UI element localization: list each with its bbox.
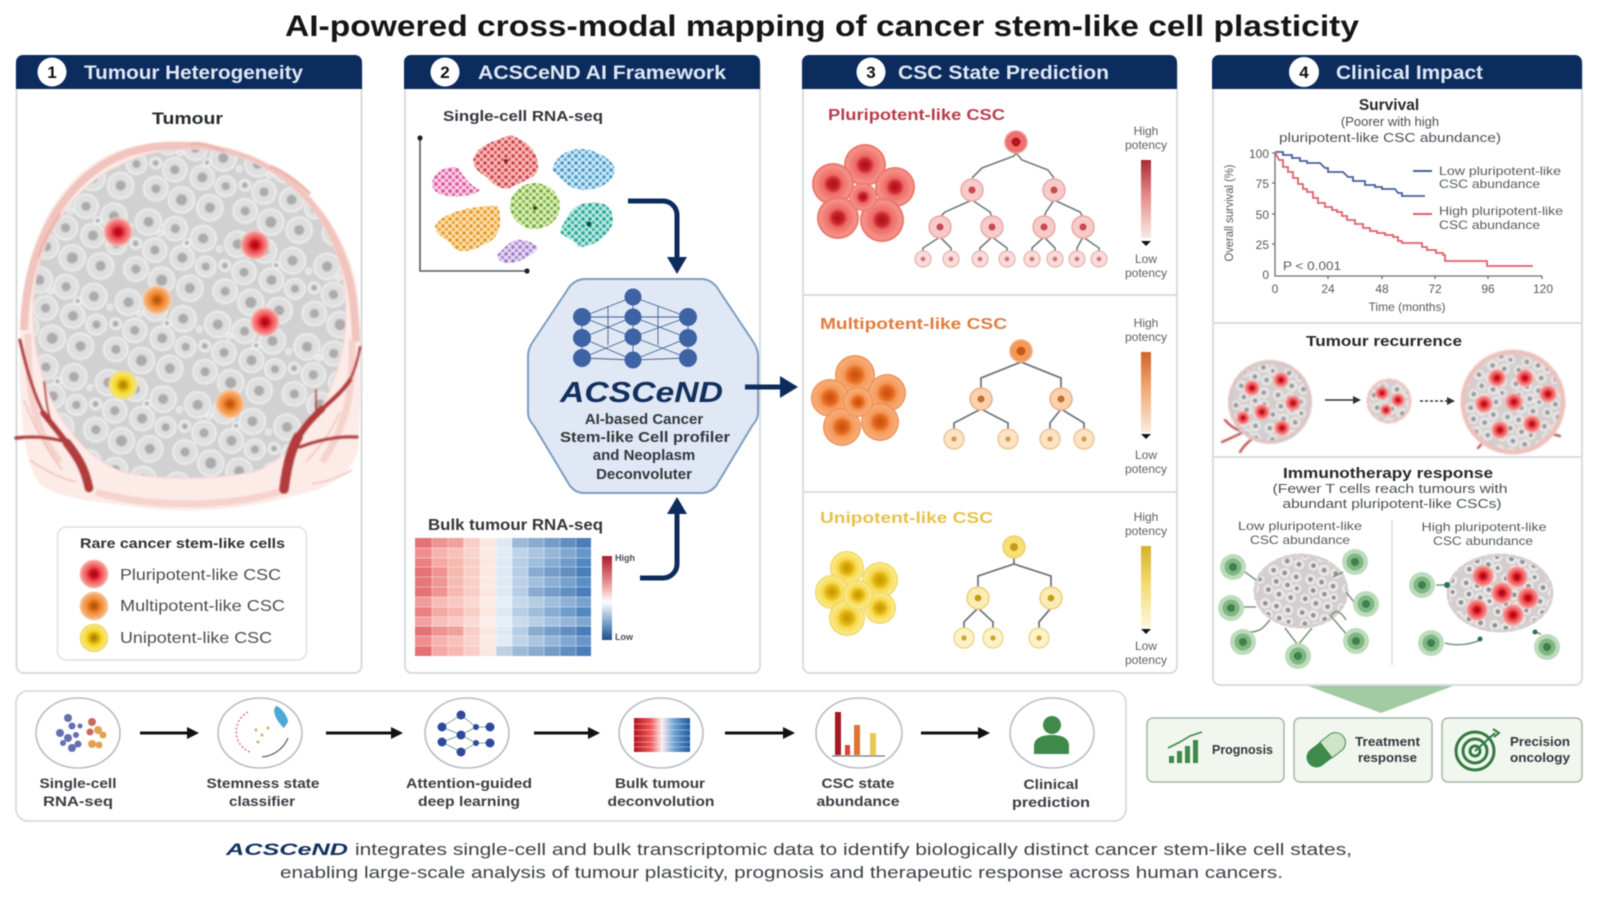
chart: Kaplan-Meier survival curves: Low pluripotent-like — [1439, 164, 1561, 178]
step: bulk tumour deconvolution — [608, 698, 714, 809]
card: precision oncology: Precision — [1510, 735, 1570, 749]
section: unipotent-like CSC: Unipotent-like CSC — [820, 510, 994, 527]
card: treatment response — [1294, 718, 1432, 782]
legend: rare cancer stem-like cells: Pluripotent-like CSC — [120, 567, 281, 584]
panel: clinical impact — [1212, 55, 1582, 685]
card: prognosis — [1147, 718, 1284, 782]
footer summary: ACSCeND — [225, 840, 348, 859]
chart: Kaplan-Meier survival curves: 24 — [1321, 282, 1335, 296]
potency scale: multipotent: Low — [1135, 448, 1157, 462]
heading: survival — [1279, 97, 1501, 145]
panel: ACSCeND AI framework — [404, 55, 798, 673]
panel: tumour heterogeneity — [16, 55, 362, 673]
icon: rising bars — [1168, 732, 1202, 763]
label: bulk tumour RNA-seq: Bulk tumour RNA-seq — [428, 517, 603, 534]
green funnel arrow — [1308, 686, 1453, 713]
icon: neural network — [573, 288, 697, 368]
model description: AI-based Cancer — [585, 411, 703, 428]
heading: immunotherapy response — [1272, 466, 1508, 511]
icon: target — [1456, 729, 1499, 770]
section: multipotent-like CSC: Multipotent-like CSC — [820, 316, 1008, 333]
potency scale: unipotent: Low — [1135, 639, 1157, 653]
arrow — [725, 727, 795, 739]
chart: Kaplan-Meier survival curves: Overall survival (%) — [1224, 164, 1236, 262]
panel header 1: 1 — [47, 63, 57, 82]
heading: immunotherapy response: Immunotherapy response — [1283, 466, 1493, 482]
chart: Kaplan-Meier survival curves — [1224, 147, 1563, 314]
arrow — [140, 727, 199, 739]
model description — [560, 411, 730, 483]
footer summary — [225, 840, 1352, 882]
chart: Kaplan-Meier survival curves: CSC abundance — [1439, 177, 1540, 191]
arrow: model to prediction — [745, 376, 798, 398]
model description: and Neoplasm — [593, 447, 695, 464]
step: attention-guided deep learning — [406, 698, 532, 809]
potency scale: unipotent — [1125, 510, 1167, 667]
step: single-cell RNA-seq — [36, 698, 120, 809]
legend: rare cancer stem-like cells — [58, 527, 306, 660]
potency scale: unipotent: High — [1134, 510, 1158, 524]
panel header 4 — [1212, 55, 1582, 89]
section: pluripotent-like CSC — [812, 107, 1167, 280]
step: single-cell RNA-seq: RNA-seq — [43, 794, 113, 809]
legend: rare cancer stem-like cells: Unipotent-like CSC — [120, 630, 272, 647]
panel header 3: 3 — [866, 63, 876, 82]
colour scale: Low — [615, 632, 634, 642]
step: bulk tumour deconvolution: Bulk tumour — [615, 776, 706, 791]
chart: Kaplan-Meier survival curves: 96 — [1481, 282, 1495, 296]
chart: Kaplan-Meier survival curves: 75 — [1256, 177, 1269, 191]
step: bulk tumour deconvolution: deconvolution — [608, 794, 714, 809]
immunotherapy: high abundance: High pluripotent-like — [1422, 520, 1547, 534]
chart: Kaplan-Meier survival curves: 0 — [1262, 268, 1269, 282]
chart: Kaplan-Meier survival curves: 25 — [1256, 238, 1269, 252]
footer summary: integrates single-cell and bulk transcriptomic data to identify biologically distinct cancer stem-like cell states, — [355, 841, 1352, 859]
arrow: single-cell to model — [628, 201, 687, 274]
heading: immunotherapy response: abundant pluripotent-like CSCs) — [1282, 497, 1502, 511]
section: unipotent-like CSC — [815, 510, 1167, 667]
title: AI-powered cross-modal mapping of cancer stem-like cell plasticity — [285, 10, 1359, 43]
icon: capsule — [1303, 729, 1349, 771]
arrow — [921, 727, 990, 739]
step: clinical prediction — [1010, 698, 1094, 810]
chart: Kaplan-Meier survival curves: 48 — [1375, 282, 1389, 296]
potency scale: multipotent: potency — [1125, 330, 1167, 344]
immunotherapy: high abundance: CSC abundance — [1433, 534, 1533, 548]
arrow: bulk to model — [640, 497, 687, 578]
chart: Kaplan-Meier survival curves: Time (months) — [1369, 300, 1445, 314]
card: precision oncology — [1442, 718, 1582, 782]
section: multipotent-like CSC — [811, 316, 1167, 476]
chart: Kaplan-Meier survival curves: 50 — [1256, 208, 1269, 222]
card: precision oncology: oncology — [1510, 751, 1570, 765]
chart: Kaplan-Meier survival curves: CSC abundance — [1439, 218, 1540, 232]
model description: Deconvoluter — [596, 466, 692, 483]
chart: single-cell clusters — [417, 135, 615, 274]
chart: bulk heatmap — [415, 538, 591, 656]
step: stemness state classifier: classifier — [229, 794, 296, 809]
potency scale: pluripotent: potency — [1125, 138, 1167, 152]
heading: survival: pluripotent-like CSC abundance) — [1279, 130, 1501, 145]
cell cluster: pluripotent — [812, 144, 915, 242]
colour scale — [602, 553, 635, 642]
lineage tree: unipotent — [954, 536, 1062, 648]
card: treatment response: response — [1358, 751, 1417, 765]
illustration: tumour mass with vessels — [16, 142, 361, 510]
potency scale: multipotent: High — [1134, 316, 1158, 330]
arrow — [534, 727, 600, 739]
model hexagon — [528, 279, 758, 493]
model description: Stem-like Cell profiler — [560, 429, 730, 446]
panel header 3: CSC State Prediction — [898, 63, 1109, 84]
potency scale: pluripotent: potency — [1125, 266, 1167, 280]
model name: ACSCeND — [559, 377, 723, 409]
illustration: tumour recurrence — [1222, 352, 1563, 452]
arrow — [326, 727, 403, 739]
potency scale: pluripotent — [1125, 124, 1167, 280]
cell cluster: unipotent — [815, 551, 898, 636]
panel: CSC state prediction — [802, 55, 1177, 673]
footer summary: enabling large-scale analysis of tumour plasticity, prognosis and therapeutic response across human cancers. — [280, 864, 1283, 882]
potency scale: unipotent: potency — [1125, 653, 1167, 667]
card: treatment response: Treatment — [1355, 735, 1421, 749]
panel header 2: ACSCeND AI Framework — [478, 63, 726, 84]
step: single-cell RNA-seq: Single-cell — [40, 776, 116, 791]
chart: Kaplan-Meier survival curves: 72 — [1428, 282, 1442, 296]
step: attention-guided deep learning: Attention-guided — [406, 776, 532, 791]
potency scale: pluripotent: High — [1134, 124, 1158, 138]
immunotherapy: low abundance — [1218, 519, 1379, 669]
lineage tree: multipotent — [944, 340, 1094, 449]
potency scale: pluripotent: Low — [1135, 252, 1157, 266]
panel header 2 — [404, 55, 760, 89]
immunotherapy: low abundance: CSC abundance — [1250, 533, 1350, 547]
legend: rare cancer stem-like cells: Multipotent-like CSC — [120, 598, 285, 615]
card: prognosis: Prognosis — [1212, 743, 1273, 757]
potency scale: multipotent: potency — [1125, 462, 1167, 476]
panel header 2: 2 — [440, 63, 450, 82]
panel header 4: 4 — [1299, 63, 1309, 82]
potency scale: multipotent — [1125, 316, 1167, 476]
panel header 1: Tumour Heterogeneity — [84, 63, 303, 84]
chart: Kaplan-Meier survival curves: 0 — [1272, 282, 1279, 296]
workflow strip — [16, 691, 1126, 821]
legend: rare cancer stem-like cells: Rare cancer stem-like cells — [80, 535, 285, 551]
heading: tumour: Tumour — [152, 109, 223, 128]
lineage tree: pluripotent — [915, 131, 1107, 267]
chart: Kaplan-Meier survival curves: High pluripotent-like — [1439, 204, 1563, 218]
chart: Kaplan-Meier survival curves: 100 — [1249, 147, 1269, 161]
chart: Kaplan-Meier survival curves: 120 — [1533, 282, 1553, 296]
label: single-cell RNA-seq: Single-cell RNA-seq — [443, 108, 603, 125]
step: CSC state abundance — [816, 698, 902, 809]
immunotherapy: high abundance — [1409, 520, 1560, 660]
cell cluster: multipotent — [811, 355, 906, 446]
heading: immunotherapy response: (Fewer T cells reach tumours with — [1272, 482, 1508, 496]
chart: Kaplan-Meier survival curves: P < 0.001 — [1283, 259, 1341, 273]
immunotherapy: low abundance: Low pluripotent-like — [1238, 519, 1362, 533]
arrow: regression — [1325, 396, 1361, 404]
panel header 3 — [802, 55, 1177, 89]
heading: survival: Survival — [1359, 97, 1419, 114]
heading: tumour recurrence: Tumour recurrence — [1306, 333, 1462, 350]
step: CSC state abundance: CSC state — [822, 776, 895, 791]
arrow: regrowth — [1420, 397, 1455, 405]
step: stemness state classifier — [206, 698, 320, 809]
potency scale: unipotent: potency — [1125, 524, 1167, 538]
section: pluripotent-like CSC: Pluripotent-like CSC — [828, 107, 1006, 124]
heading: survival: (Poorer with high — [1341, 114, 1439, 129]
panel header 1 — [16, 55, 362, 89]
colour scale: High — [615, 553, 635, 563]
step: attention-guided deep learning: deep learning — [418, 794, 520, 809]
step: clinical prediction: prediction — [1012, 795, 1090, 810]
step: clinical prediction: Clinical — [1024, 777, 1078, 792]
panel header 4: Clinical Impact — [1336, 63, 1484, 84]
step: CSC state abundance: abundance — [816, 794, 900, 809]
step: stemness state classifier: Stemness state — [206, 776, 320, 791]
